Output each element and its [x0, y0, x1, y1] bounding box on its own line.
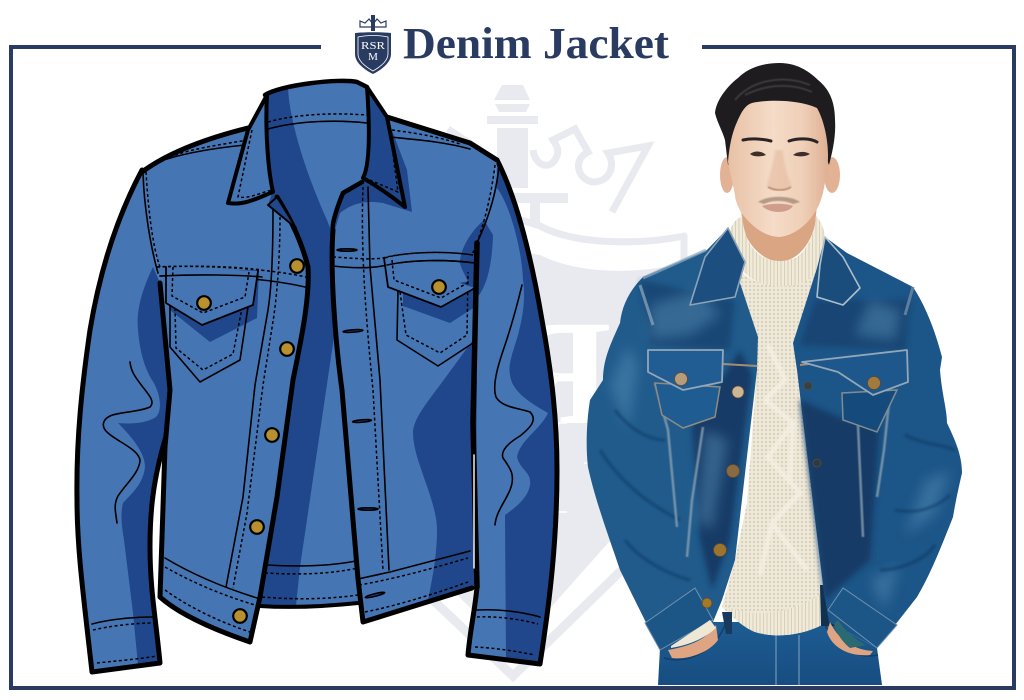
jacket body — [587, 228, 962, 648]
mouth — [762, 204, 793, 212]
jacket cuff left — [645, 588, 713, 650]
jeans details — [776, 635, 799, 685]
collar right — [363, 87, 405, 207]
jacket inner shadow right — [820, 585, 836, 626]
title: Denim Jacket — [403, 19, 669, 68]
sweater hem ribbing — [727, 593, 822, 635]
neck — [741, 195, 818, 262]
left pocket — [157, 266, 262, 382]
jacket collar right — [817, 237, 860, 305]
shield outer band — [433, 562, 630, 676]
jacket seams — [655, 383, 890, 557]
crest lower letter strokes — [556, 423, 590, 512]
upper right shadow — [460, 220, 493, 300]
right chest pocket — [802, 350, 908, 432]
photo: man wearing denim jacket — [587, 63, 962, 685]
left chest pocket — [648, 350, 723, 428]
jacket buttons — [674, 372, 880, 608]
right sleeve wrinkle — [495, 285, 533, 525]
hair highlight — [735, 80, 812, 100]
logo crest — [355, 15, 391, 74]
eyebrows — [743, 139, 817, 142]
jacket collar left — [690, 228, 745, 305]
left pocket shadow — [166, 270, 259, 342]
jacket interior back — [260, 80, 368, 607]
sword crossbar — [470, 193, 568, 225]
right pocket — [384, 252, 475, 366]
watermark crest — [433, 85, 684, 676]
collar shadow — [333, 120, 412, 236]
collar left — [228, 95, 296, 228]
crest letters: Я — [503, 290, 611, 456]
nose underside — [768, 187, 791, 190]
logo crest: M — [368, 51, 378, 63]
jacket denim wash highlights — [610, 290, 950, 610]
right body shadow — [413, 340, 477, 600]
left front panel — [142, 128, 310, 642]
right front panel — [332, 117, 499, 622]
shield fill — [440, 235, 680, 650]
hair — [715, 63, 835, 165]
left sleeve — [77, 170, 170, 672]
jeans — [658, 622, 882, 685]
right pocket shadow — [403, 280, 475, 323]
hem band right — [358, 551, 470, 579]
chest seam stitching — [650, 352, 906, 366]
crown outline — [533, 129, 648, 212]
face — [728, 101, 828, 237]
mustache shadow — [758, 197, 800, 204]
illustrated denim jacket — [77, 80, 557, 672]
left sleeve wrinkle — [103, 362, 152, 523]
jeans pocket lines — [664, 625, 878, 660]
sweater body — [722, 262, 822, 635]
sweater cable pattern — [760, 345, 807, 575]
sleeve cuffs and skin at pockets — [668, 612, 873, 658]
sword pommel and blade — [487, 85, 538, 188]
title group — [355, 15, 669, 74]
right sleeve — [468, 160, 557, 664]
jacket dark folds — [692, 350, 880, 600]
buttonholes — [337, 249, 385, 599]
jacket cuff right — [828, 588, 897, 648]
shield top band — [440, 190, 684, 270]
turtleneck collar — [730, 216, 825, 286]
ears — [720, 157, 840, 193]
logo crest: RSR — [361, 40, 386, 52]
nose shading — [767, 150, 792, 190]
buttons — [197, 259, 446, 623]
eyes — [750, 151, 810, 156]
